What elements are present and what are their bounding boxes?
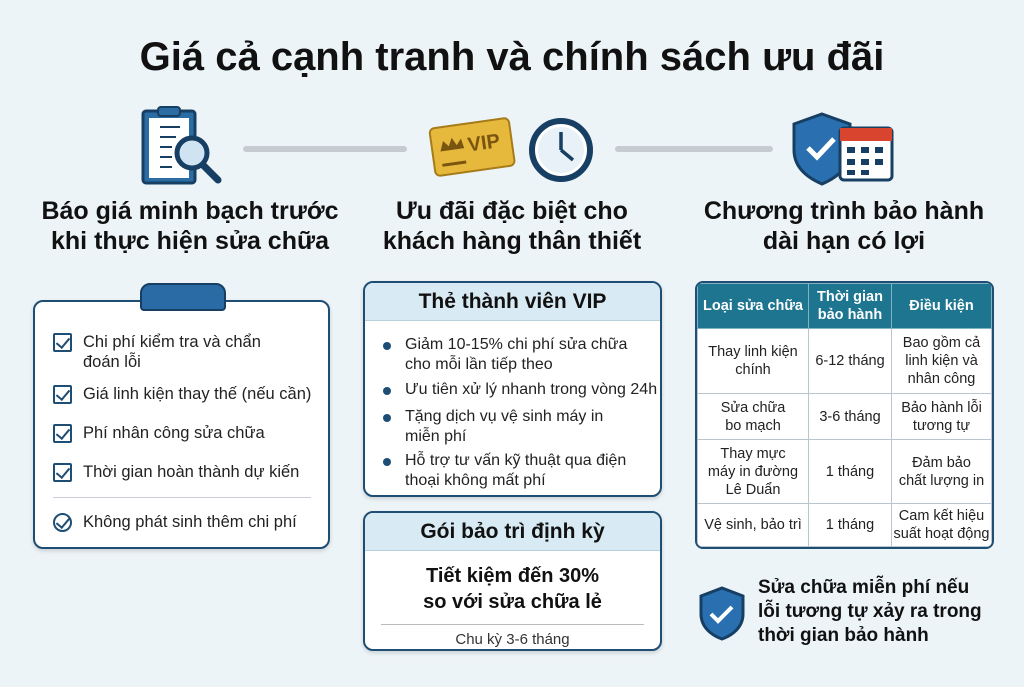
- panel: warranty table: Vệ sinh, bảo trì: [704, 517, 802, 533]
- panel: warranty table: Sửa chữa: [721, 400, 785, 416]
- panel: warranty table: chất lượng in: [899, 472, 984, 488]
- panel: warranty table: chính: [735, 362, 771, 378]
- heading: left: Báo giá minh bạch trước: [41, 197, 339, 225]
- heading: right: dài hạn có lợi: [763, 227, 925, 255]
- panel: quote checklist: Thời gian hoàn thành dự kiến: [83, 463, 299, 481]
- heading: middle: Ưu đãi đặc biệt cho: [396, 197, 628, 225]
- panel: VIP card: miễn phí: [405, 428, 466, 445]
- panel: warranty table: 6-12 tháng: [815, 353, 885, 369]
- heading: middle: khách hàng thân thiết: [383, 227, 641, 255]
- icon: clock: [529, 118, 593, 182]
- heading: left: khi thực hiện sửa chữa: [51, 227, 329, 255]
- panel: maintenance package: Tiết kiệm đến 30%: [426, 565, 599, 587]
- panel: quote checklist: [33, 300, 330, 549]
- panel: warranty table: Bao gồm cả: [903, 335, 980, 351]
- icon: VIP card: [428, 117, 516, 177]
- callout: free repair: lỗi tương tự xảy ra trong: [758, 601, 982, 622]
- panel: maintenance package: [363, 511, 662, 651]
- clipboard clip: [140, 283, 226, 311]
- connector line left: [243, 146, 407, 152]
- panel: VIP card: Tặng dịch vụ vệ sinh máy in: [405, 408, 603, 425]
- panel: quote checklist: Chi phí kiểm tra và chẩn: [83, 333, 261, 351]
- heading: middle: [383, 197, 641, 255]
- panel: VIP card: Hỗ trợ tư vấn kỹ thuật qua điện: [405, 452, 626, 469]
- panel: warranty table: Đảm bảo: [912, 454, 971, 470]
- icon: clipboard with magnifier: [142, 106, 222, 184]
- callout: free repair: [758, 576, 982, 646]
- panel: warranty table: Loại sửa chữa: [703, 298, 803, 314]
- panel: VIP card: Giảm 10-15% chi phí sửa chữa: [405, 336, 627, 353]
- panel: maintenance package: Gói bảo trì định kỳ: [420, 520, 605, 543]
- connector line right: [615, 146, 773, 152]
- panel: warranty table: Thay mực: [720, 446, 786, 462]
- panel: quote checklist: Phí nhân công sửa chữa: [83, 424, 265, 442]
- panel: warranty table: bo mạch: [725, 418, 781, 434]
- panel: maintenance package: Chu kỳ 3-6 tháng: [455, 631, 570, 648]
- icon: shield and calendar: [792, 112, 894, 186]
- panel: warranty table: Bảo hành lỗi: [901, 400, 982, 416]
- panel: warranty table: bảo hành: [818, 307, 882, 323]
- callout: free repair: Sửa chữa miễn phí nếu: [758, 577, 969, 598]
- heading: left: [41, 197, 339, 255]
- panel: warranty table: máy in đường: [708, 464, 798, 480]
- panel: warranty table: Thời gian: [817, 289, 883, 305]
- heading: right: Chương trình bảo hành: [704, 197, 984, 225]
- panel: quote checklist: Giá linh kiện thay thế (nếu cần): [83, 385, 311, 403]
- panel: warranty table: 1 tháng: [826, 517, 874, 533]
- heading: right: [704, 197, 984, 255]
- panel: VIP card: [363, 281, 662, 497]
- panel: warranty table: linh kiện và: [905, 353, 978, 369]
- panel: maintenance package: so với sửa chữa lẻ: [423, 591, 602, 613]
- panel: VIP card: Ưu tiên xử lý nhanh trong vòng 24h: [405, 381, 657, 398]
- panel: warranty table: tương tự: [913, 418, 970, 434]
- panel: warranty table: nhân công: [908, 371, 975, 387]
- panel: warranty table: 1 tháng: [826, 464, 874, 480]
- panel: warranty table: [695, 281, 994, 549]
- panel: warranty table: Lê Duẩn: [726, 482, 780, 498]
- panel: VIP card: cho mỗi lần tiếp theo: [405, 356, 553, 373]
- panel: warranty table: 3-6 tháng: [819, 408, 881, 424]
- callout: free repair: thời gian bảo hành: [758, 625, 929, 646]
- panel: warranty table: Cam kết hiệu: [899, 508, 984, 524]
- panel: warranty table: suất hoạt động: [894, 526, 989, 542]
- panel: quote checklist: Không phát sinh thêm chi phí: [83, 513, 297, 531]
- icon: VIP card: VIP: [466, 130, 501, 156]
- panel: VIP card: thoại không mất phí: [405, 472, 546, 489]
- icon: shield check: [700, 586, 744, 641]
- panel: warranty table: Điều kiện: [909, 298, 974, 314]
- panel: quote checklist: đoán lỗi: [83, 353, 141, 371]
- panel: warranty table: Thay linh kiện: [708, 344, 798, 360]
- panel: VIP card: Thẻ thành viên VIP: [419, 290, 606, 313]
- title: Giá cả cạnh tranh và chính sách ưu đãi: [140, 35, 884, 79]
